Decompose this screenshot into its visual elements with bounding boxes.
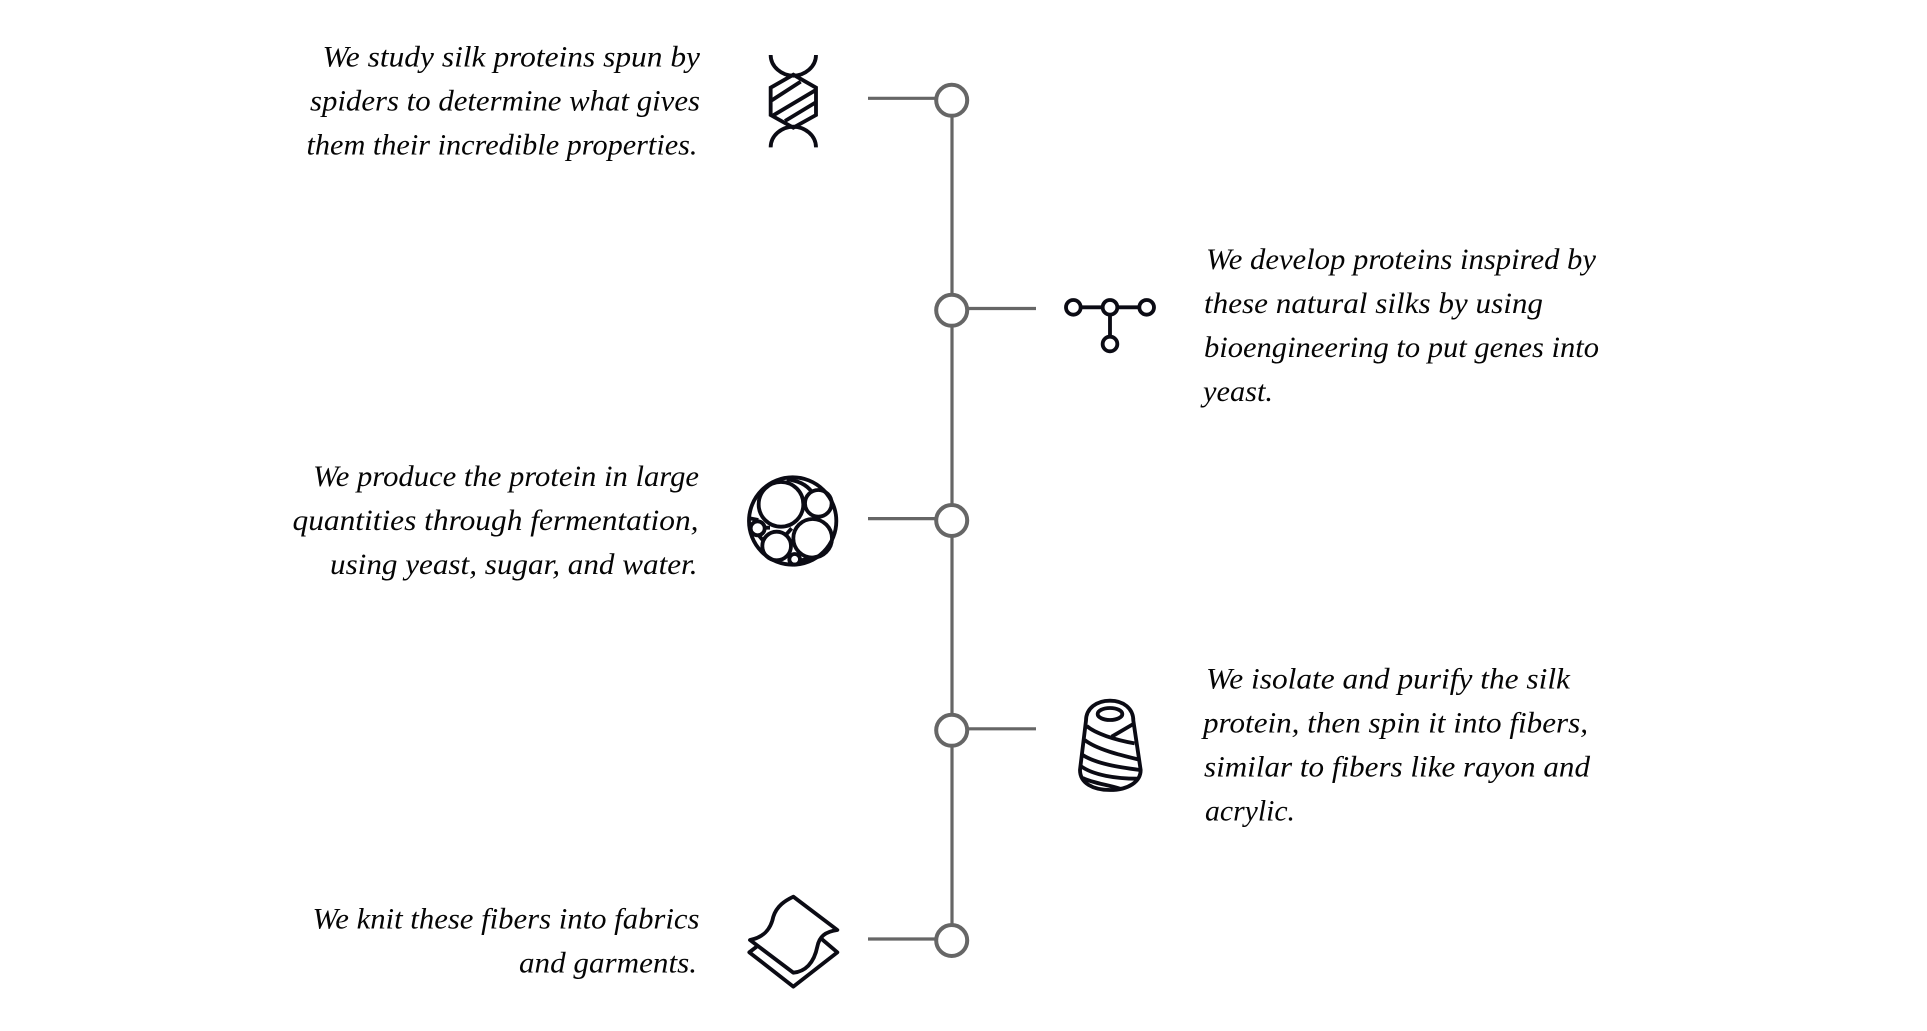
text: step 2 develop proteins: yeast. [1200,375,1273,408]
text: step 4 isolate and spin: acrylic. [1205,794,1295,827]
text: step 2 develop proteins: bioengineering to put genes into [1204,331,1599,364]
icon: stacked fabric sheets [749,897,837,987]
text: step 2 develop proteins: We develop proteins inspired by [1206,243,1597,276]
timeline: vertical line with nodes and connectors [868,85,1036,956]
text: step 4 isolate and spin: similar to fibers like rayon and [1204,750,1591,783]
text: step 5 knit fabrics: We knit these fibers into fabrics [312,902,700,936]
text: step 1 study silk proteins: We study silk proteins spun by [322,40,701,74]
text: step 3 produce protein: We produce the protein in large [313,460,699,493]
text: step 3 produce protein: quantities through fermentation, [292,504,698,537]
icon: DNA helix [771,55,816,147]
icon: thread spool [1080,701,1141,790]
text: step 2 develop proteins: these natural silks by using [1204,287,1543,320]
text: step 5 knit fabrics: and garments. [519,946,697,980]
text: step 1 study silk proteins: spiders to determine what gives [310,84,700,118]
text: step 4 isolate and spin: protein, then spin it into fibers, [1201,706,1588,739]
icon: yeast cells in circle [749,477,836,565]
text: step 4 isolate and spin: We isolate and purify the silk [1206,662,1571,695]
text: step 1 study silk proteins: them their incredible properties. [306,128,698,162]
text: step 3 produce protein: using yeast, sugar, and water. [330,548,698,581]
icon: molecule nodes [1066,300,1154,351]
